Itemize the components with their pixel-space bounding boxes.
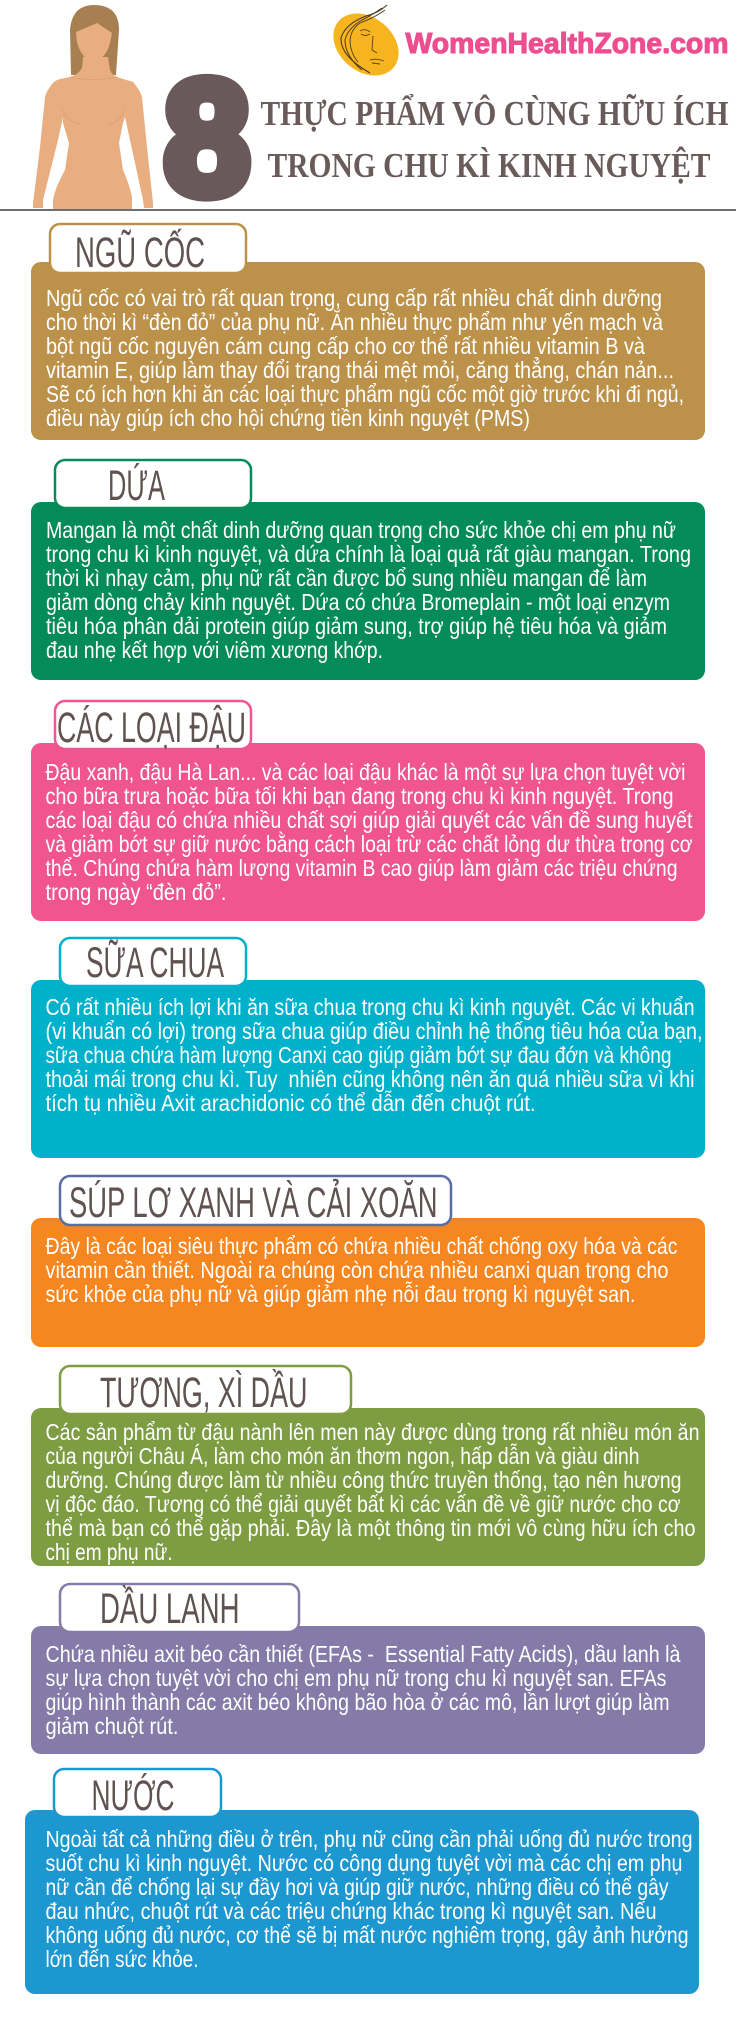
body text [46, 285, 684, 431]
heading tab [60, 938, 246, 987]
heading tab: DẦU LANH [100, 1585, 240, 1633]
panel: các loại đậu [31, 701, 705, 921]
illustration: woman silhouette [33, 5, 153, 209]
body text: đau nhức, chuột rút và các triệu chứng khác trong kì nguyệt san. Nếu [46, 1898, 656, 1924]
body text: bột ngũ cốc nguyên cám cung cấp cho cơ thể rất nhiều vitamin B và [46, 333, 645, 359]
heading tab: NƯỚC [92, 1772, 174, 1820]
body text [46, 1419, 700, 1565]
body text [46, 994, 702, 1116]
heading tab [60, 1176, 451, 1227]
heading tab [55, 460, 251, 510]
body text: thời kì nhạy cảm, phụ nữ rất cần được bổ sung nhiều mangan để làm [46, 565, 647, 591]
panel background [31, 1408, 705, 1566]
logo text: WomenHealthZone.com [406, 28, 728, 60]
body text: Ngũ cốc có vai trò rất quan trọng, cung cấp rất nhiều chất dinh dưỡng [46, 285, 662, 311]
body text: lớn đến sức khỏe. [46, 1946, 198, 1972]
panel background [31, 502, 705, 680]
big number 8: 8 [164, 48, 250, 228]
panel: sữa chua [31, 938, 705, 1158]
body text: điều này giúp ích cho hội chứng tiền kinh nguyệt (PMS) [46, 405, 530, 431]
panel background [25, 1810, 699, 1994]
body text [46, 759, 693, 905]
panel: nước [25, 1769, 699, 1994]
body text [46, 1233, 678, 1307]
heading tab [60, 1366, 351, 1417]
panel background [31, 980, 705, 1158]
panel background [31, 262, 705, 440]
panel: ngũ cốc [31, 224, 705, 440]
body text: chị em phụ nữ. [46, 1539, 172, 1565]
heading tab: DỨA [108, 462, 165, 510]
panel: súp lơ xanh và cải xoăn [31, 1176, 705, 1347]
panel: tương, xì dầu [31, 1366, 705, 1566]
heading tab: SỮA CHUA [86, 939, 224, 987]
body text: đau nhẹ kết hợp với viêm xương khớp. [46, 637, 383, 663]
body text: sức khỏe của phụ nữ và giúp giảm nhẹ nỗi đau trong kì nguyệt san. [46, 1281, 636, 1307]
panel: dứa [31, 460, 705, 680]
panel background [31, 1218, 705, 1347]
logo icon: golden face [321, 1, 411, 88]
panel: dầu lanh [31, 1584, 705, 1754]
body text [46, 1826, 692, 1972]
heading tab: NGŨ CỐC [75, 228, 205, 277]
title [260, 92, 728, 185]
body text [46, 1641, 681, 1739]
panel background [31, 743, 705, 921]
panel background [31, 1626, 705, 1754]
body text: giảm chuột rút. [46, 1713, 178, 1739]
heading tab: TƯƠNG, XÌ DẦU [100, 1369, 308, 1417]
body text [46, 517, 691, 663]
body text: của người Châu Á, làm cho món ăn thơm ngon, hấp dẫn và giàu dinh [46, 1443, 640, 1469]
heading tab: CÁC LOẠI ĐẬU [57, 704, 246, 752]
heading tab: SÚP LƠ XANH VÀ CẢI XOĂN [69, 1178, 438, 1227]
body text: tích tụ nhiều Axit arachidonic có thể dẫn đến chuột rút. [46, 1090, 536, 1116]
body text: trong ngày “đèn đỏ”. [46, 879, 226, 905]
heading tab [55, 701, 251, 752]
heading tab [50, 224, 246, 277]
